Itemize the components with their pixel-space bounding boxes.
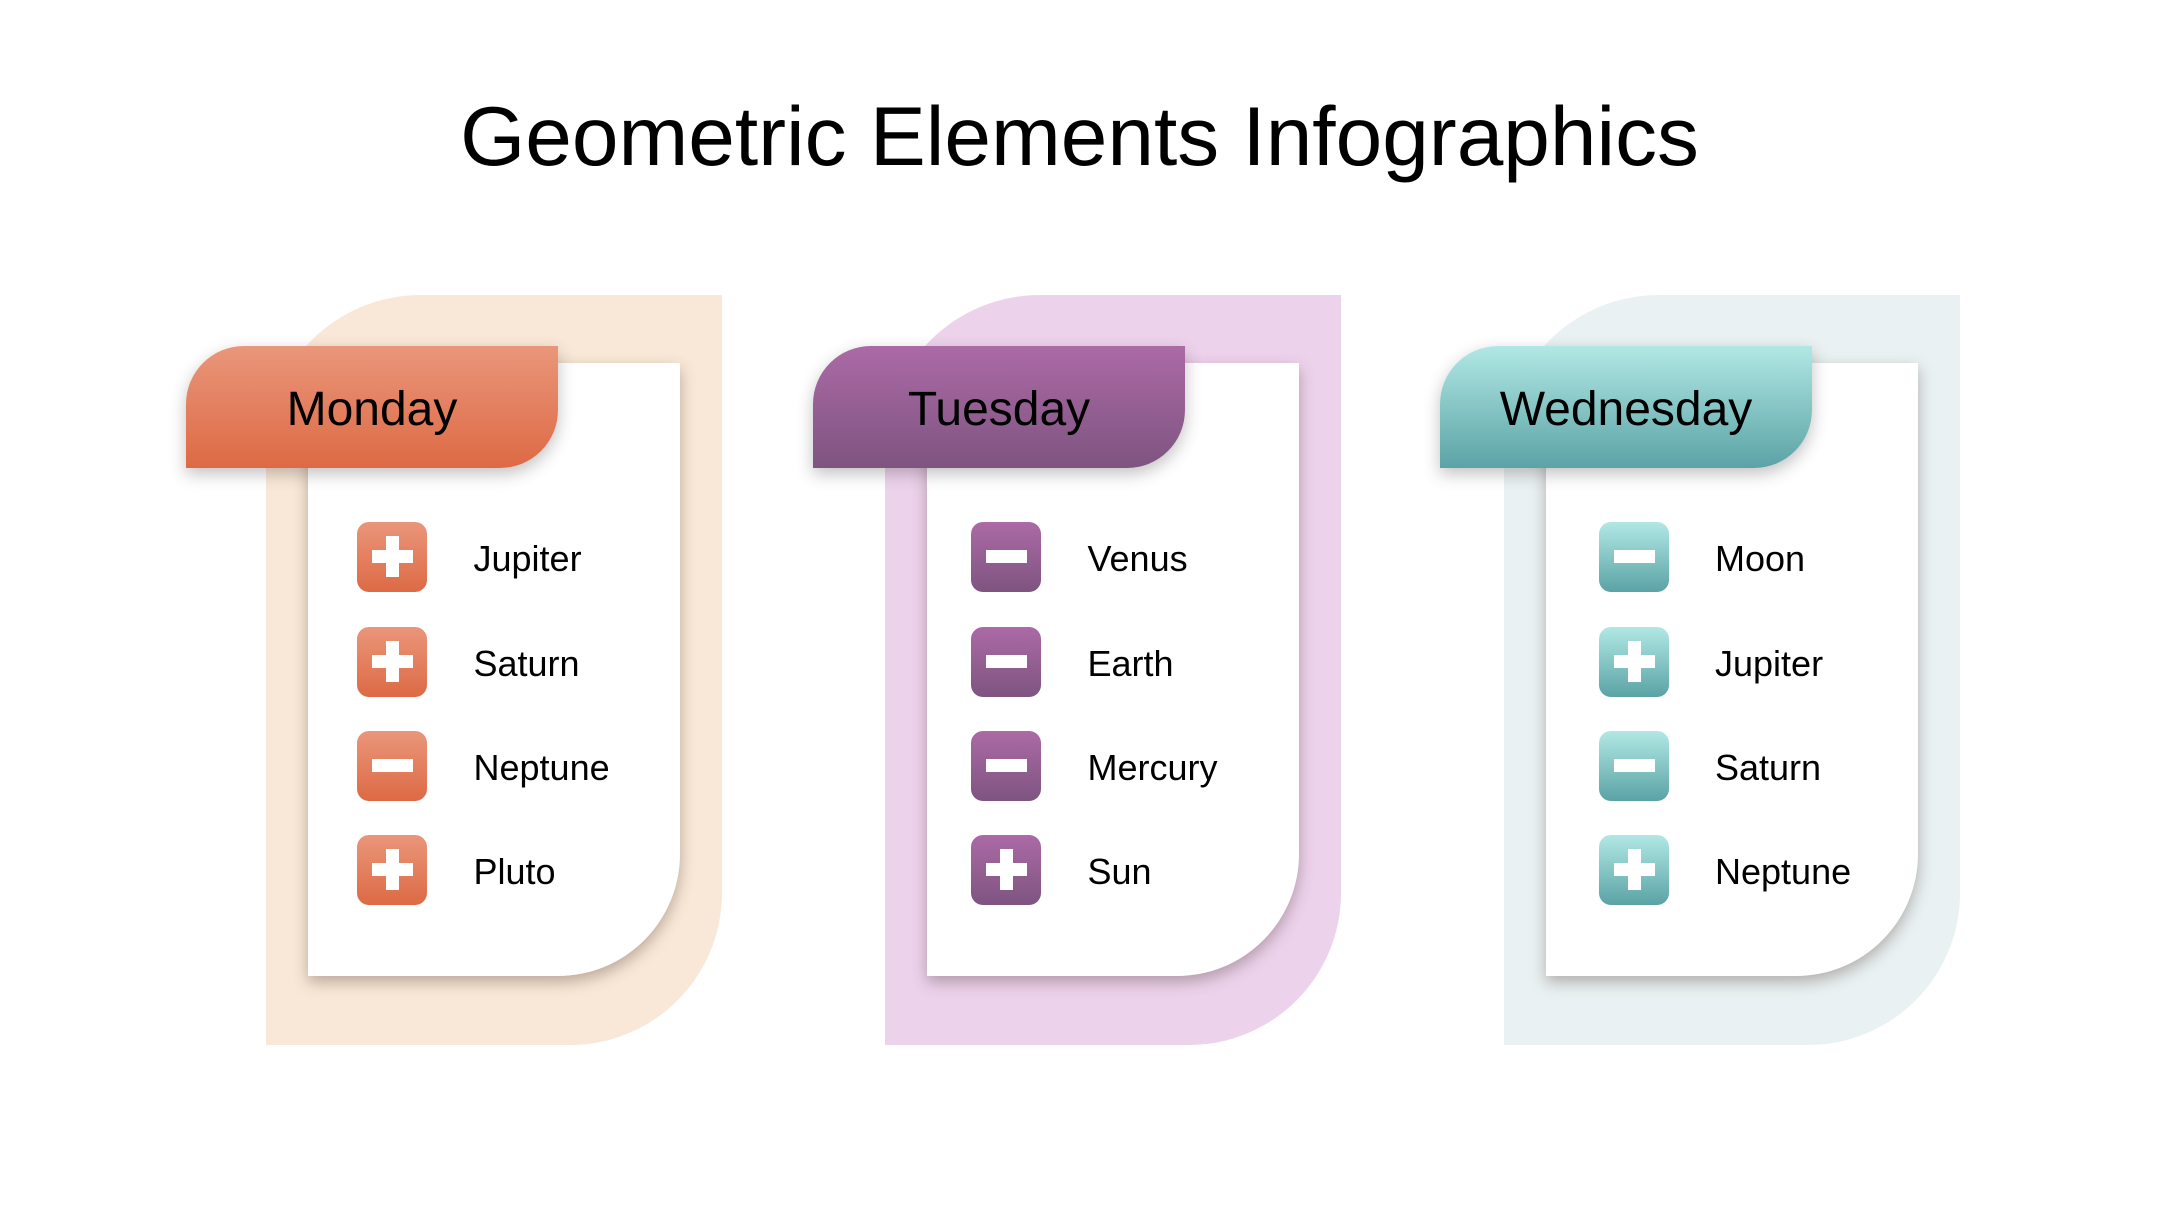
heading tab: Tuesday [813, 346, 1185, 468]
label: Earth: Earth [1088, 642, 1174, 684]
white card: Wednesday [1546, 363, 1918, 976]
list item: Venus [971, 522, 1188, 592]
list item: Saturn [1599, 731, 1821, 801]
panel: Monday [177, 295, 722, 1045]
icon: minus [1598, 522, 1668, 592]
icon: minus [357, 731, 427, 801]
panel: Wednesday [1431, 295, 1960, 1045]
label: Mercury: Mercury [1088, 746, 1218, 788]
list item: Saturn [357, 627, 580, 697]
background shape: Wednesday [1504, 295, 1960, 1044]
list item: Jupiter [1599, 627, 1823, 697]
label: Neptune: Neptune [474, 746, 610, 788]
label: Moon: Moon [1715, 538, 1805, 578]
label: Jupiter: Jupiter [1715, 642, 1823, 684]
background shape: Tuesday [884, 295, 1340, 1044]
label: Sun: Sun [1088, 850, 1152, 892]
label: Neptune: Neptune [1715, 850, 1851, 892]
list item: Moon [1599, 522, 1805, 592]
icon: plus [971, 835, 1041, 905]
icon: plus [1598, 835, 1668, 905]
title: Geometric Elements Infographics [460, 89, 1699, 183]
icon: plus [357, 835, 427, 905]
label: Saturn: Saturn [1715, 746, 1821, 788]
panel: Tuesday [804, 295, 1341, 1045]
icon: minus [971, 731, 1041, 801]
heading tab: Monday [186, 346, 558, 468]
white card: Monday [308, 363, 680, 976]
white card: Tuesday [927, 363, 1299, 976]
icon: minus [971, 522, 1041, 592]
icon: plus [1598, 627, 1668, 697]
icon: minus [1598, 731, 1668, 801]
label: Saturn: Saturn [474, 642, 580, 684]
list item: Neptune [357, 731, 610, 801]
icon: plus [357, 522, 427, 592]
list item: Sun [971, 835, 1152, 905]
label: Venus: Venus [1088, 538, 1188, 578]
heading tab: Tuesday: Tuesday [908, 383, 1090, 436]
list item: Earth [971, 627, 1174, 697]
icon: minus [971, 627, 1041, 697]
list item: Jupiter [357, 522, 582, 592]
heading tab: Monday: Monday [287, 383, 457, 436]
list item: Pluto [357, 835, 556, 905]
list item: Neptune [1599, 835, 1851, 905]
label: Pluto: Pluto [474, 850, 556, 892]
heading tab: Wednesday [1440, 346, 1812, 468]
list item: Mercury [971, 731, 1218, 801]
background shape: Monday [266, 295, 722, 1044]
heading tab: Wednesday: Wednesday [1500, 383, 1752, 436]
icon: plus [357, 627, 427, 697]
label: Jupiter: Jupiter [474, 538, 582, 578]
